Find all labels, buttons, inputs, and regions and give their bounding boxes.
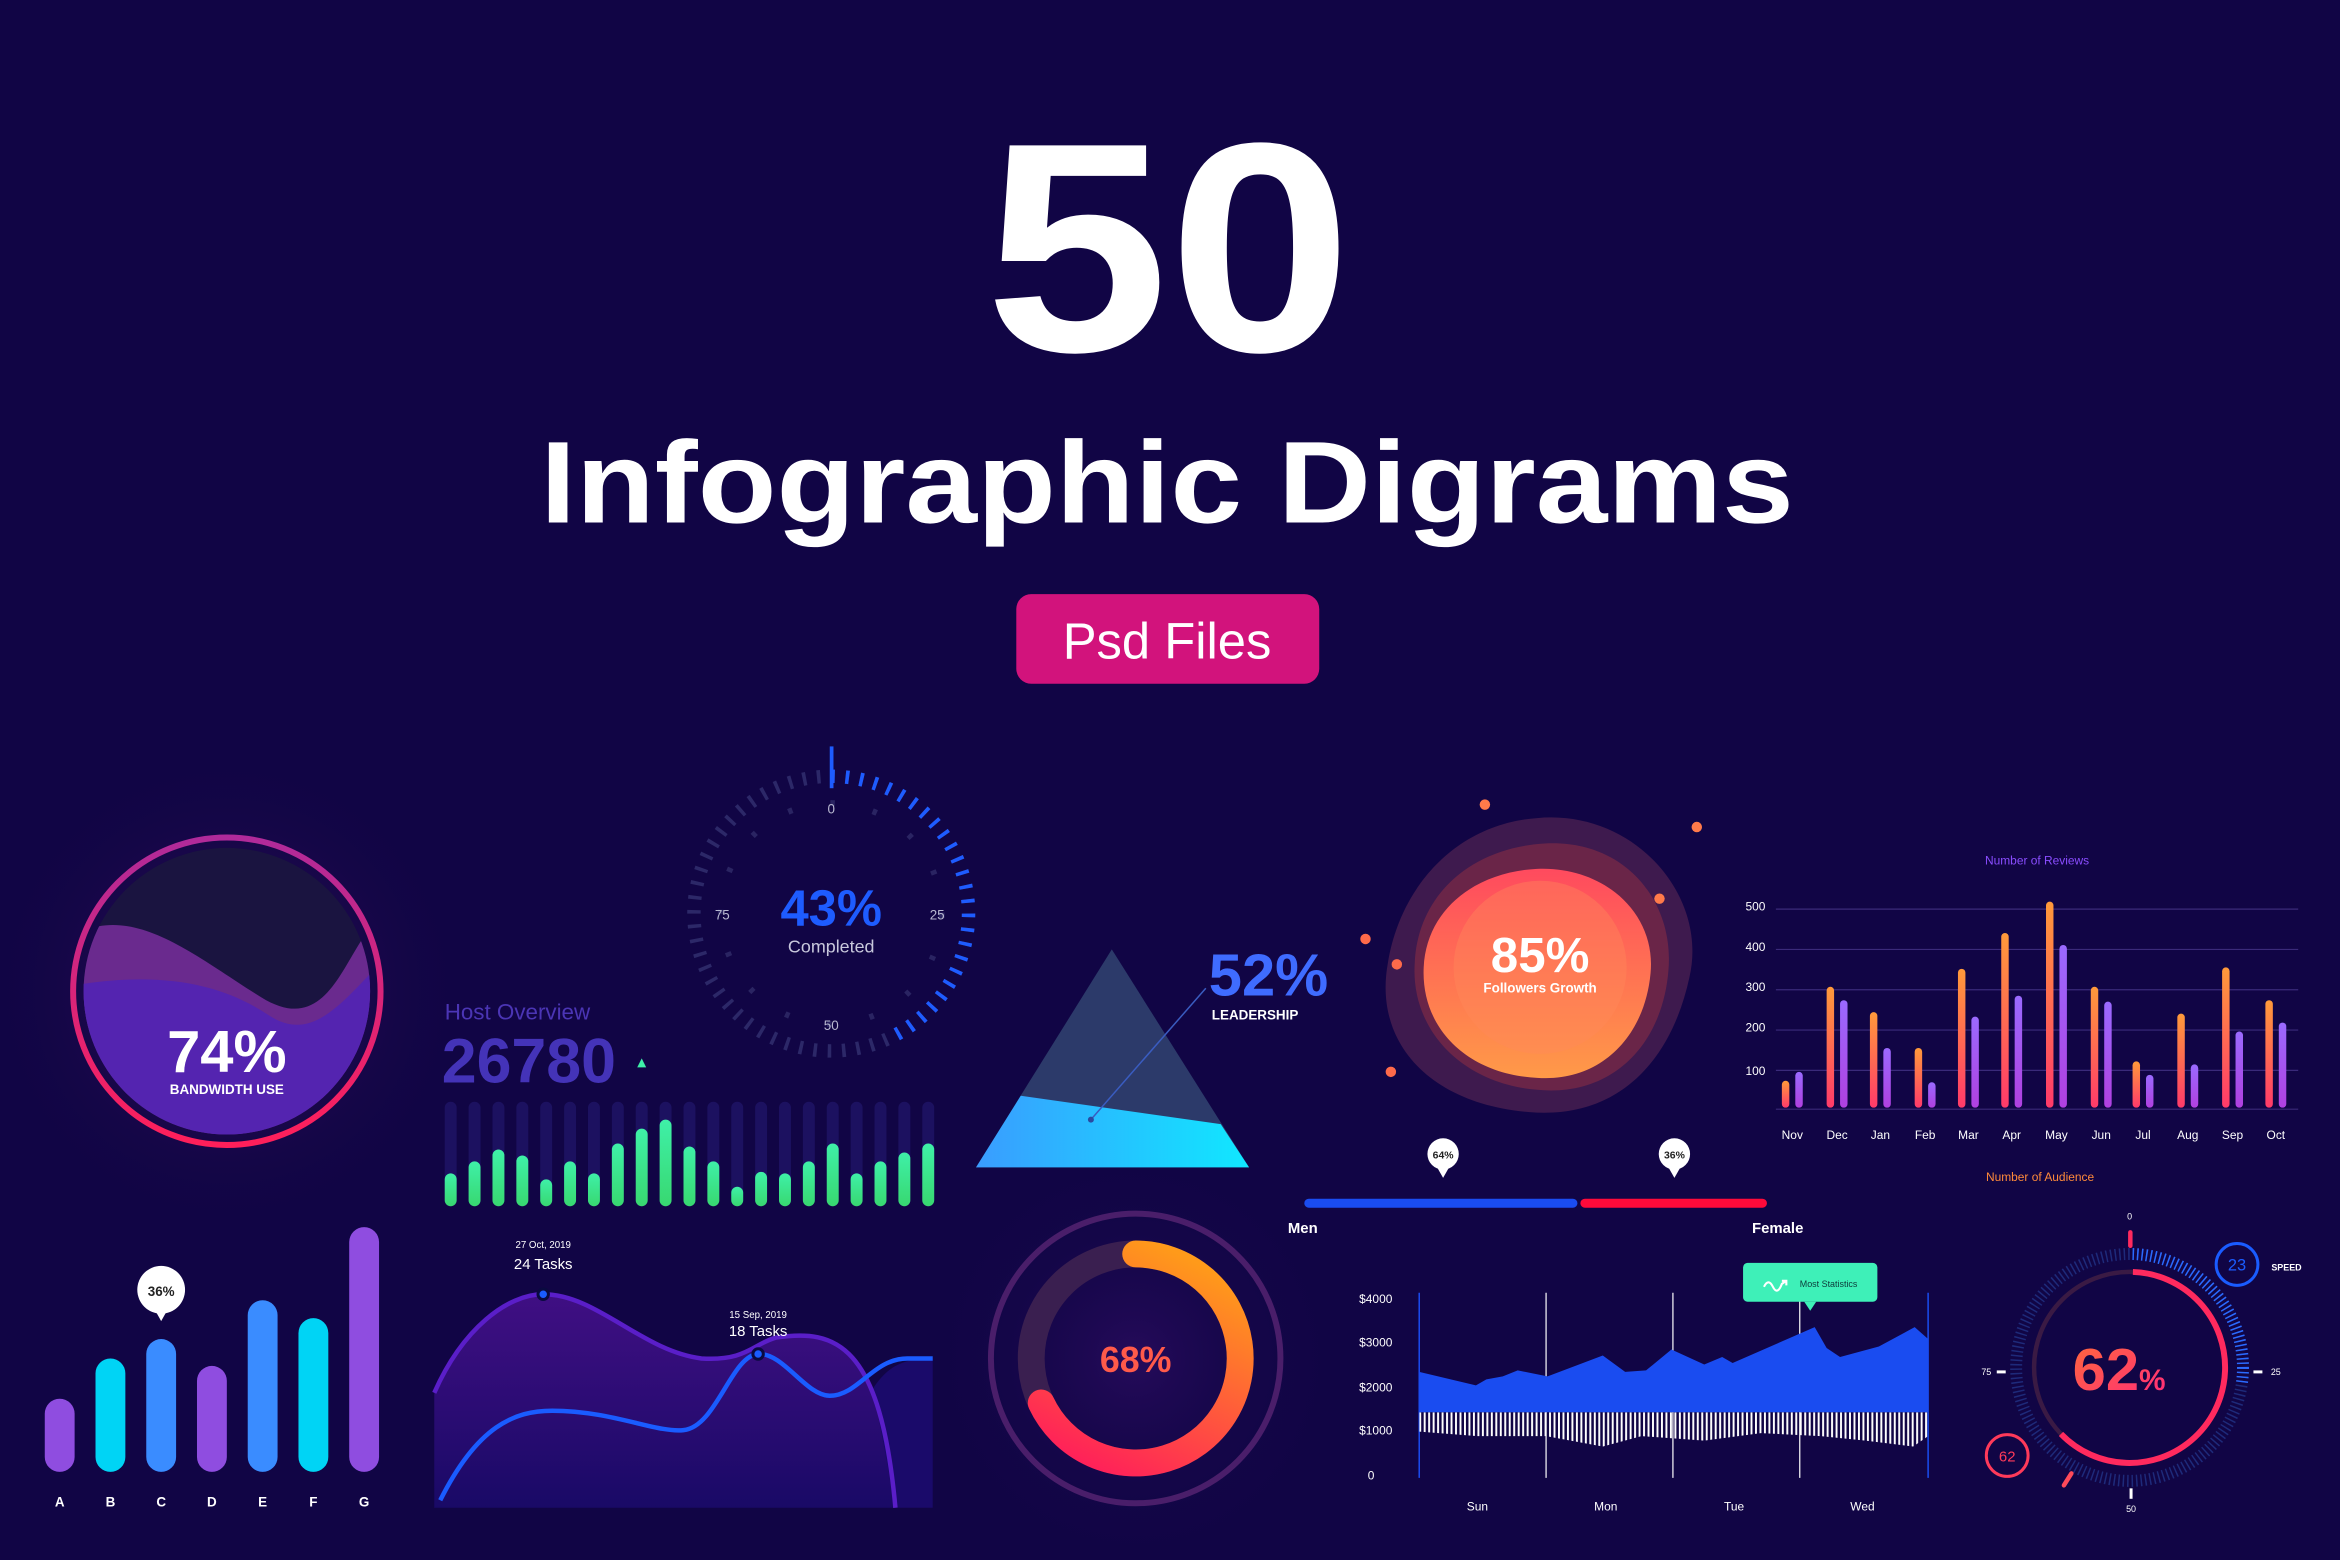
chart: number of reviews: Nov — [1782, 1128, 1803, 1142]
chart: tasks wave area: 24 Tasks — [514, 1256, 572, 1273]
chart: speed gauge 62%: 62 — [1999, 1448, 2016, 1465]
callout: Most Statistics: Most Statistics — [1800, 1279, 1858, 1289]
chart: number of reviews: Number of Audience — [1986, 1170, 2094, 1184]
chart: number of reviews: Feb — [1915, 1128, 1936, 1142]
chart: number of reviews: May — [2045, 1128, 2068, 1142]
chart: number of reviews: Jul — [2135, 1128, 2151, 1142]
chart: speed gauge 62%: 25 — [2271, 1367, 2281, 1377]
panel: host overview: Host Overview — [445, 1000, 591, 1025]
chart: speed gauge 62%: 50 — [2126, 1504, 2136, 1514]
panel: bandwidth circle 74%: BANDWIDTH USE — [170, 1082, 284, 1097]
chart: A-G bar chart: E — [258, 1494, 267, 1509]
chart: number of reviews: Jun — [2092, 1128, 2111, 1142]
chart: triangle 52% leadership — [976, 942, 1328, 1167]
bar chart: green bars — [445, 1102, 934, 1206]
chart: weekly revenue area: 0 — [1368, 1468, 1375, 1482]
chart: number of reviews: Jan — [1871, 1128, 1890, 1142]
chart: A-G bar chart: A — [55, 1494, 65, 1509]
panel: bandwidth circle 74% — [73, 836, 388, 1164]
chart: number of reviews: Mar — [1958, 1128, 1979, 1142]
panel: 43% completed gauge: 43% — [780, 880, 882, 937]
chart: 85% followers growth blob: Followers Growth — [1483, 981, 1597, 996]
chart: number of reviews: Apr — [2002, 1128, 2021, 1142]
chart: men vs female bar: Men — [1288, 1220, 1318, 1237]
badge: Psd Files — [1016, 594, 1319, 684]
chart: tasks wave area: 18 Tasks — [729, 1323, 787, 1340]
callout: Most Statistics — [1743, 1263, 1877, 1311]
chart: number of reviews: 300 — [1746, 980, 1766, 994]
chart: 85% followers growth blob: 85% — [1491, 928, 1589, 983]
chart: men vs female bar — [1288, 1138, 1803, 1237]
chart: number of reviews: 400 — [1746, 940, 1766, 954]
chart: speed gauge 62%: SPEED — [2271, 1262, 2302, 1272]
title: 50: 50 — [985, 82, 1352, 415]
panel: 43% completed gauge: 75 — [715, 908, 730, 923]
chart: weekly revenue area: Sun — [1467, 1500, 1488, 1514]
chart: weekly revenue area: Tue — [1724, 1500, 1745, 1514]
chart: tasks wave area — [434, 1240, 933, 1508]
chart: weekly revenue area: $4000 — [1359, 1292, 1393, 1306]
chart: number of reviews: Aug — [2177, 1128, 2198, 1142]
chart: weekly revenue area: $1000 — [1359, 1424, 1393, 1438]
chart: 68% donut — [991, 1214, 1280, 1503]
subtitle: Infographic Digrams: Infographic Digrams — [540, 417, 1794, 547]
panel: 43% completed gauge — [694, 746, 969, 1051]
chart: men vs female bar: 64% — [1433, 1150, 1454, 1161]
chart: speed gauge 62%: 75 — [1981, 1367, 1991, 1377]
chart: weekly revenue area: $3000 — [1359, 1336, 1393, 1350]
panel: 43% completed gauge: 0 — [828, 802, 835, 817]
chart: weekly revenue area: $2000 — [1359, 1380, 1393, 1394]
chart: triangle 52% leadership: 52% — [1209, 942, 1328, 1009]
chart: weekly revenue area: Wed — [1850, 1500, 1875, 1514]
badge: Psd Files: Psd Files — [1063, 612, 1271, 669]
chart: tasks wave area: 15 Sep, 2019 — [729, 1310, 787, 1321]
chart: number of reviews: 200 — [1746, 1021, 1766, 1035]
chart: A-G bar chart: D — [207, 1494, 217, 1509]
chart: speed gauge 62%: 0 — [2127, 1212, 2132, 1222]
chart: number of reviews: Oct — [2267, 1128, 2286, 1142]
chart: A-G bar chart: G — [359, 1494, 369, 1509]
panel: host overview: 26780 — [442, 1026, 616, 1096]
chart: weekly revenue area: Mon — [1594, 1500, 1617, 1514]
panel: 43% completed gauge: 50 — [824, 1018, 839, 1033]
chart: number of reviews: 100 — [1746, 1064, 1766, 1078]
chart: A-G bar chart: F — [309, 1494, 317, 1509]
chart: number of reviews: Dec — [1826, 1128, 1848, 1142]
chart: A-G bar chart: C — [156, 1494, 166, 1509]
chart: men vs female bar: Female — [1752, 1220, 1803, 1237]
chart: 68% donut: 68% — [1100, 1340, 1172, 1380]
chart: number of reviews: Number of Reviews — [1985, 853, 2089, 867]
chart: A-G bar chart — [45, 1227, 379, 1509]
chart: 85% followers growth blob — [1360, 799, 1702, 1113]
chart: tasks wave area: 27 Oct, 2019 — [515, 1240, 571, 1251]
chart: speed gauge 62% — [1981, 1212, 2302, 1514]
panel: host overview — [442, 1000, 934, 1206]
chart: men vs female bar: 36% — [1664, 1150, 1685, 1161]
chart: speed gauge 62%: 62% — [2073, 1336, 2166, 1403]
chart: number of reviews — [1746, 853, 2298, 1184]
panel: 43% completed gauge: 25 — [930, 908, 945, 923]
chart: number of reviews: 500 — [1746, 900, 1766, 914]
chart: A-G bar chart: B — [106, 1494, 116, 1509]
chart: weekly revenue area — [1359, 1263, 1928, 1514]
chart: speed gauge 62%: 23 — [2228, 1256, 2246, 1274]
panel: bandwidth circle 74%: 74% — [167, 1018, 287, 1085]
chart: triangle 52% leadership: LEADERSHIP — [1212, 1008, 1298, 1023]
chart: number of reviews: Sep — [2222, 1128, 2244, 1142]
chart: A-G bar chart: 36% — [148, 1284, 175, 1299]
panel: 43% completed gauge: Completed — [788, 936, 875, 956]
